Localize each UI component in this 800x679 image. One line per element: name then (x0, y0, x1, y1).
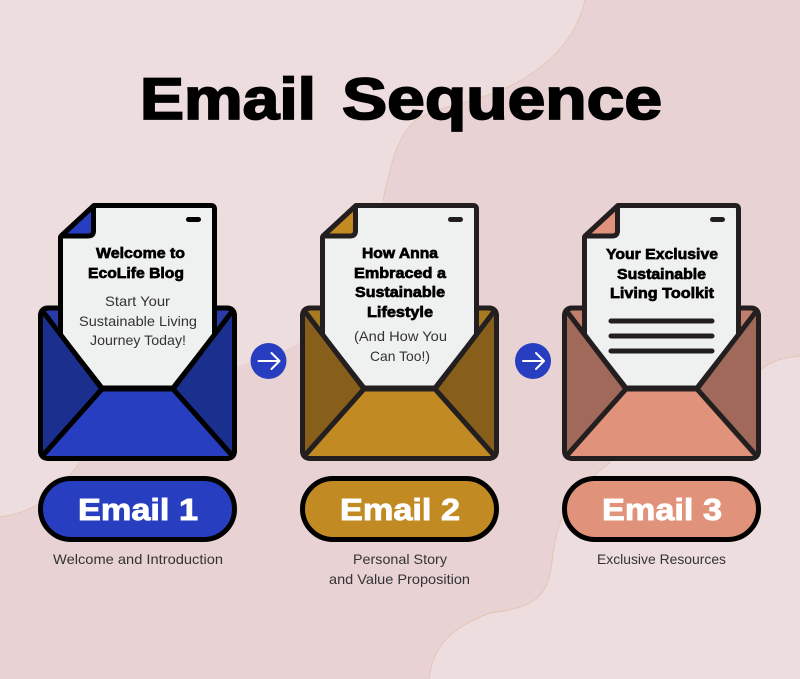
letter text 3: Sustainable (617, 267, 706, 283)
letter text 2: Can Too!) (370, 348, 430, 364)
icon: envelope 2 (300, 206, 499, 461)
arrow 2 (515, 343, 551, 379)
label pill 2: Email 2 (340, 492, 460, 527)
letter text 1: Sustainable Living (79, 313, 197, 329)
title (140, 67, 662, 132)
letter text 1: EcoLife Blog (88, 266, 184, 282)
caption 2: and Value Proposition (329, 571, 470, 587)
label pill 1 (40, 478, 234, 540)
letter text 1: Journey Today! (90, 332, 186, 348)
letter text 3: Living Toolkit (610, 286, 714, 302)
letter text 3 (606, 247, 718, 302)
panel: email 1 (38, 206, 237, 567)
caption 2 (329, 551, 470, 587)
label pill 3: Email 3 (602, 492, 722, 527)
caption 2: Personal Story (353, 551, 447, 567)
title: Email (140, 67, 316, 132)
letter text 3: Your Exclusive (606, 247, 718, 263)
panel: email 2 (300, 206, 499, 587)
letter text 1: Start Your (105, 293, 170, 309)
label pill 3 (564, 478, 758, 540)
letter text 2: How Anna (362, 246, 439, 262)
icon: envelope 1 (38, 206, 237, 461)
letter text 2: (And How You (354, 328, 447, 344)
letter text 2: Sustainable (355, 285, 445, 301)
letter text 2 (354, 246, 447, 364)
label pill 1: Email 1 (78, 492, 198, 527)
arrow 1 (250, 343, 286, 379)
letter text 2: Lifestyle (367, 305, 433, 321)
letter text 1: Welcome to (96, 246, 185, 262)
caption 1: Welcome and Introduction (53, 551, 223, 567)
icon: envelope 3 (562, 206, 761, 461)
caption 3: Exclusive Resources (597, 551, 726, 567)
panel: email 3 (562, 206, 761, 567)
letter text 1 (79, 246, 197, 348)
letter lines (611, 321, 712, 351)
letter text 2: Embraced a (354, 266, 447, 282)
title: Sequence (342, 67, 662, 132)
label pill 2 (302, 478, 496, 540)
